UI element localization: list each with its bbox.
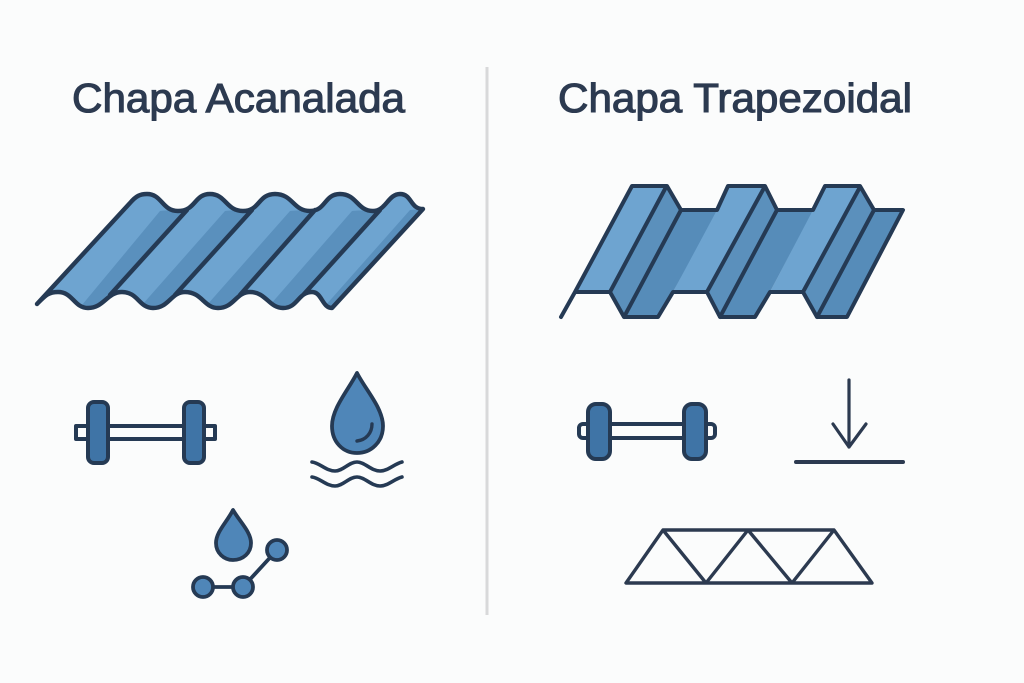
icon: water drop over waves	[312, 373, 402, 486]
icon: dumbbell (strength, corrugated)	[76, 402, 215, 463]
icon: dumbbell (strength, trapezoidal)	[579, 404, 715, 459]
icon: truss	[626, 530, 872, 583]
title: Chapa Trapezoidal: Chapa Trapezoidal	[558, 75, 912, 121]
trapezoidal sheet illustration	[561, 186, 903, 317]
title: Chapa Acanalada: Chapa Acanalada	[72, 75, 405, 121]
corrugated sheet illustration	[37, 194, 423, 308]
icon: small drop with connected nodes	[193, 510, 287, 597]
icon: downward load arrow on line	[796, 380, 903, 462]
divider between panels	[486, 67, 488, 615]
